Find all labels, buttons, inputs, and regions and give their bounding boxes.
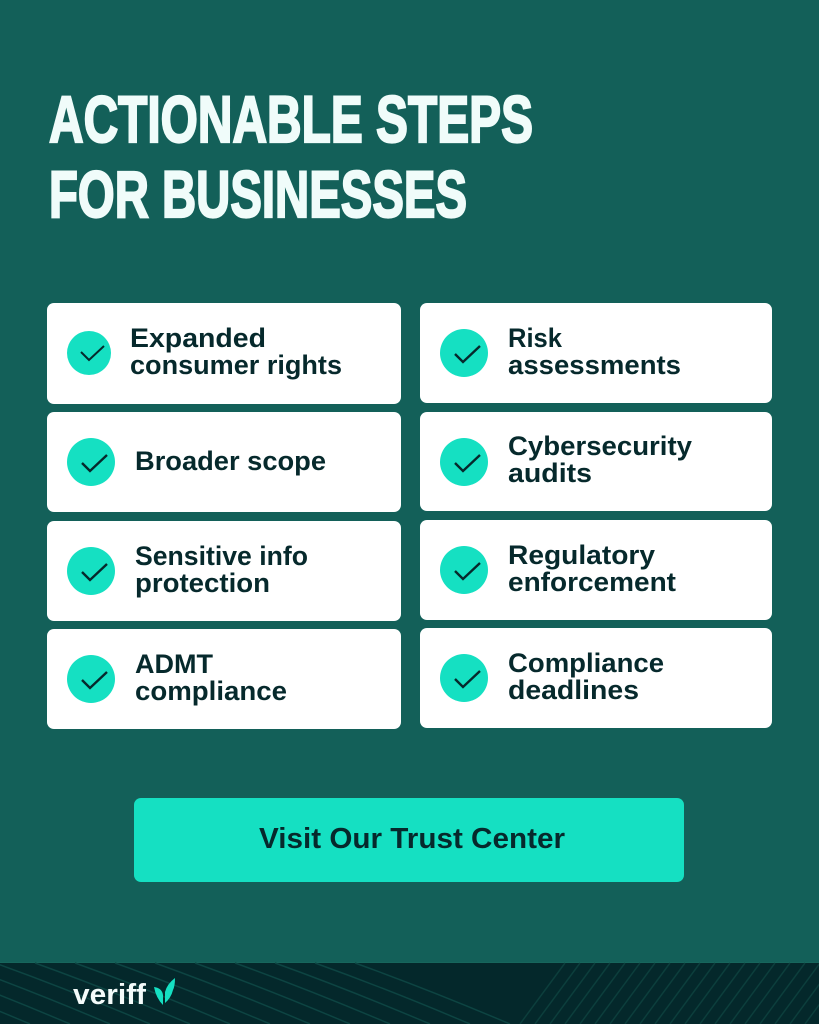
panel: expanded consumer rights: Expanded: [130, 323, 266, 353]
panel: broader scope: [47, 412, 401, 512]
icon: logo leaf: [154, 978, 175, 1005]
icon: check: [440, 329, 488, 377]
panel: sensitive info protection: Sensitive info: [135, 541, 308, 571]
panel: regulatory enforcement: [420, 520, 772, 620]
panel: sensitive info protection: protection: [135, 568, 270, 598]
panel: ADMT compliance: compliance: [135, 676, 287, 706]
panel: ADMT compliance: ADMT: [135, 649, 213, 679]
panel: compliance deadlines: [420, 628, 772, 728]
panel: compliance deadlines: deadlines: [508, 675, 639, 705]
icon: check: [440, 438, 488, 486]
title: ACTIONABLE STEPS: [49, 82, 533, 156]
icon: check: [67, 547, 115, 595]
title: FOR BUSINESSES: [49, 157, 467, 231]
icon: check: [67, 655, 115, 703]
panel: regulatory enforcement: enforcement: [508, 567, 676, 597]
panel: cybersecurity audits: [420, 412, 772, 511]
panel: sensitive info protection: [47, 521, 401, 621]
panel: cybersecurity audits: Cybersecurity: [508, 431, 692, 461]
panel: expanded consumer rights: consumer rights: [130, 350, 342, 380]
button: visit our trust center: [134, 798, 684, 882]
panel: expanded consumer rights: [47, 303, 401, 404]
footer band: [0, 962, 819, 1024]
icon: check: [67, 438, 115, 486]
button: visit our trust center: Visit Our Trust Center: [259, 823, 565, 855]
icon: check: [440, 546, 488, 594]
icon: check: [67, 331, 111, 375]
logo: veriff: veriff: [73, 979, 146, 1011]
panel: risk assessments: [420, 303, 772, 403]
panel: cybersecurity audits: audits: [508, 458, 592, 488]
logo: veriff: [73, 978, 175, 1011]
panel: broader scope: Broader scope: [135, 446, 326, 476]
panel: ADMT compliance: [47, 629, 401, 729]
panel: regulatory enforcement: Regulatory: [508, 540, 655, 570]
panel: risk assessments: assessments: [508, 350, 681, 380]
title: [49, 82, 533, 231]
panel: risk assessments: Risk: [508, 323, 562, 353]
panel: compliance deadlines: Compliance: [508, 648, 664, 678]
icon: check: [440, 654, 488, 702]
